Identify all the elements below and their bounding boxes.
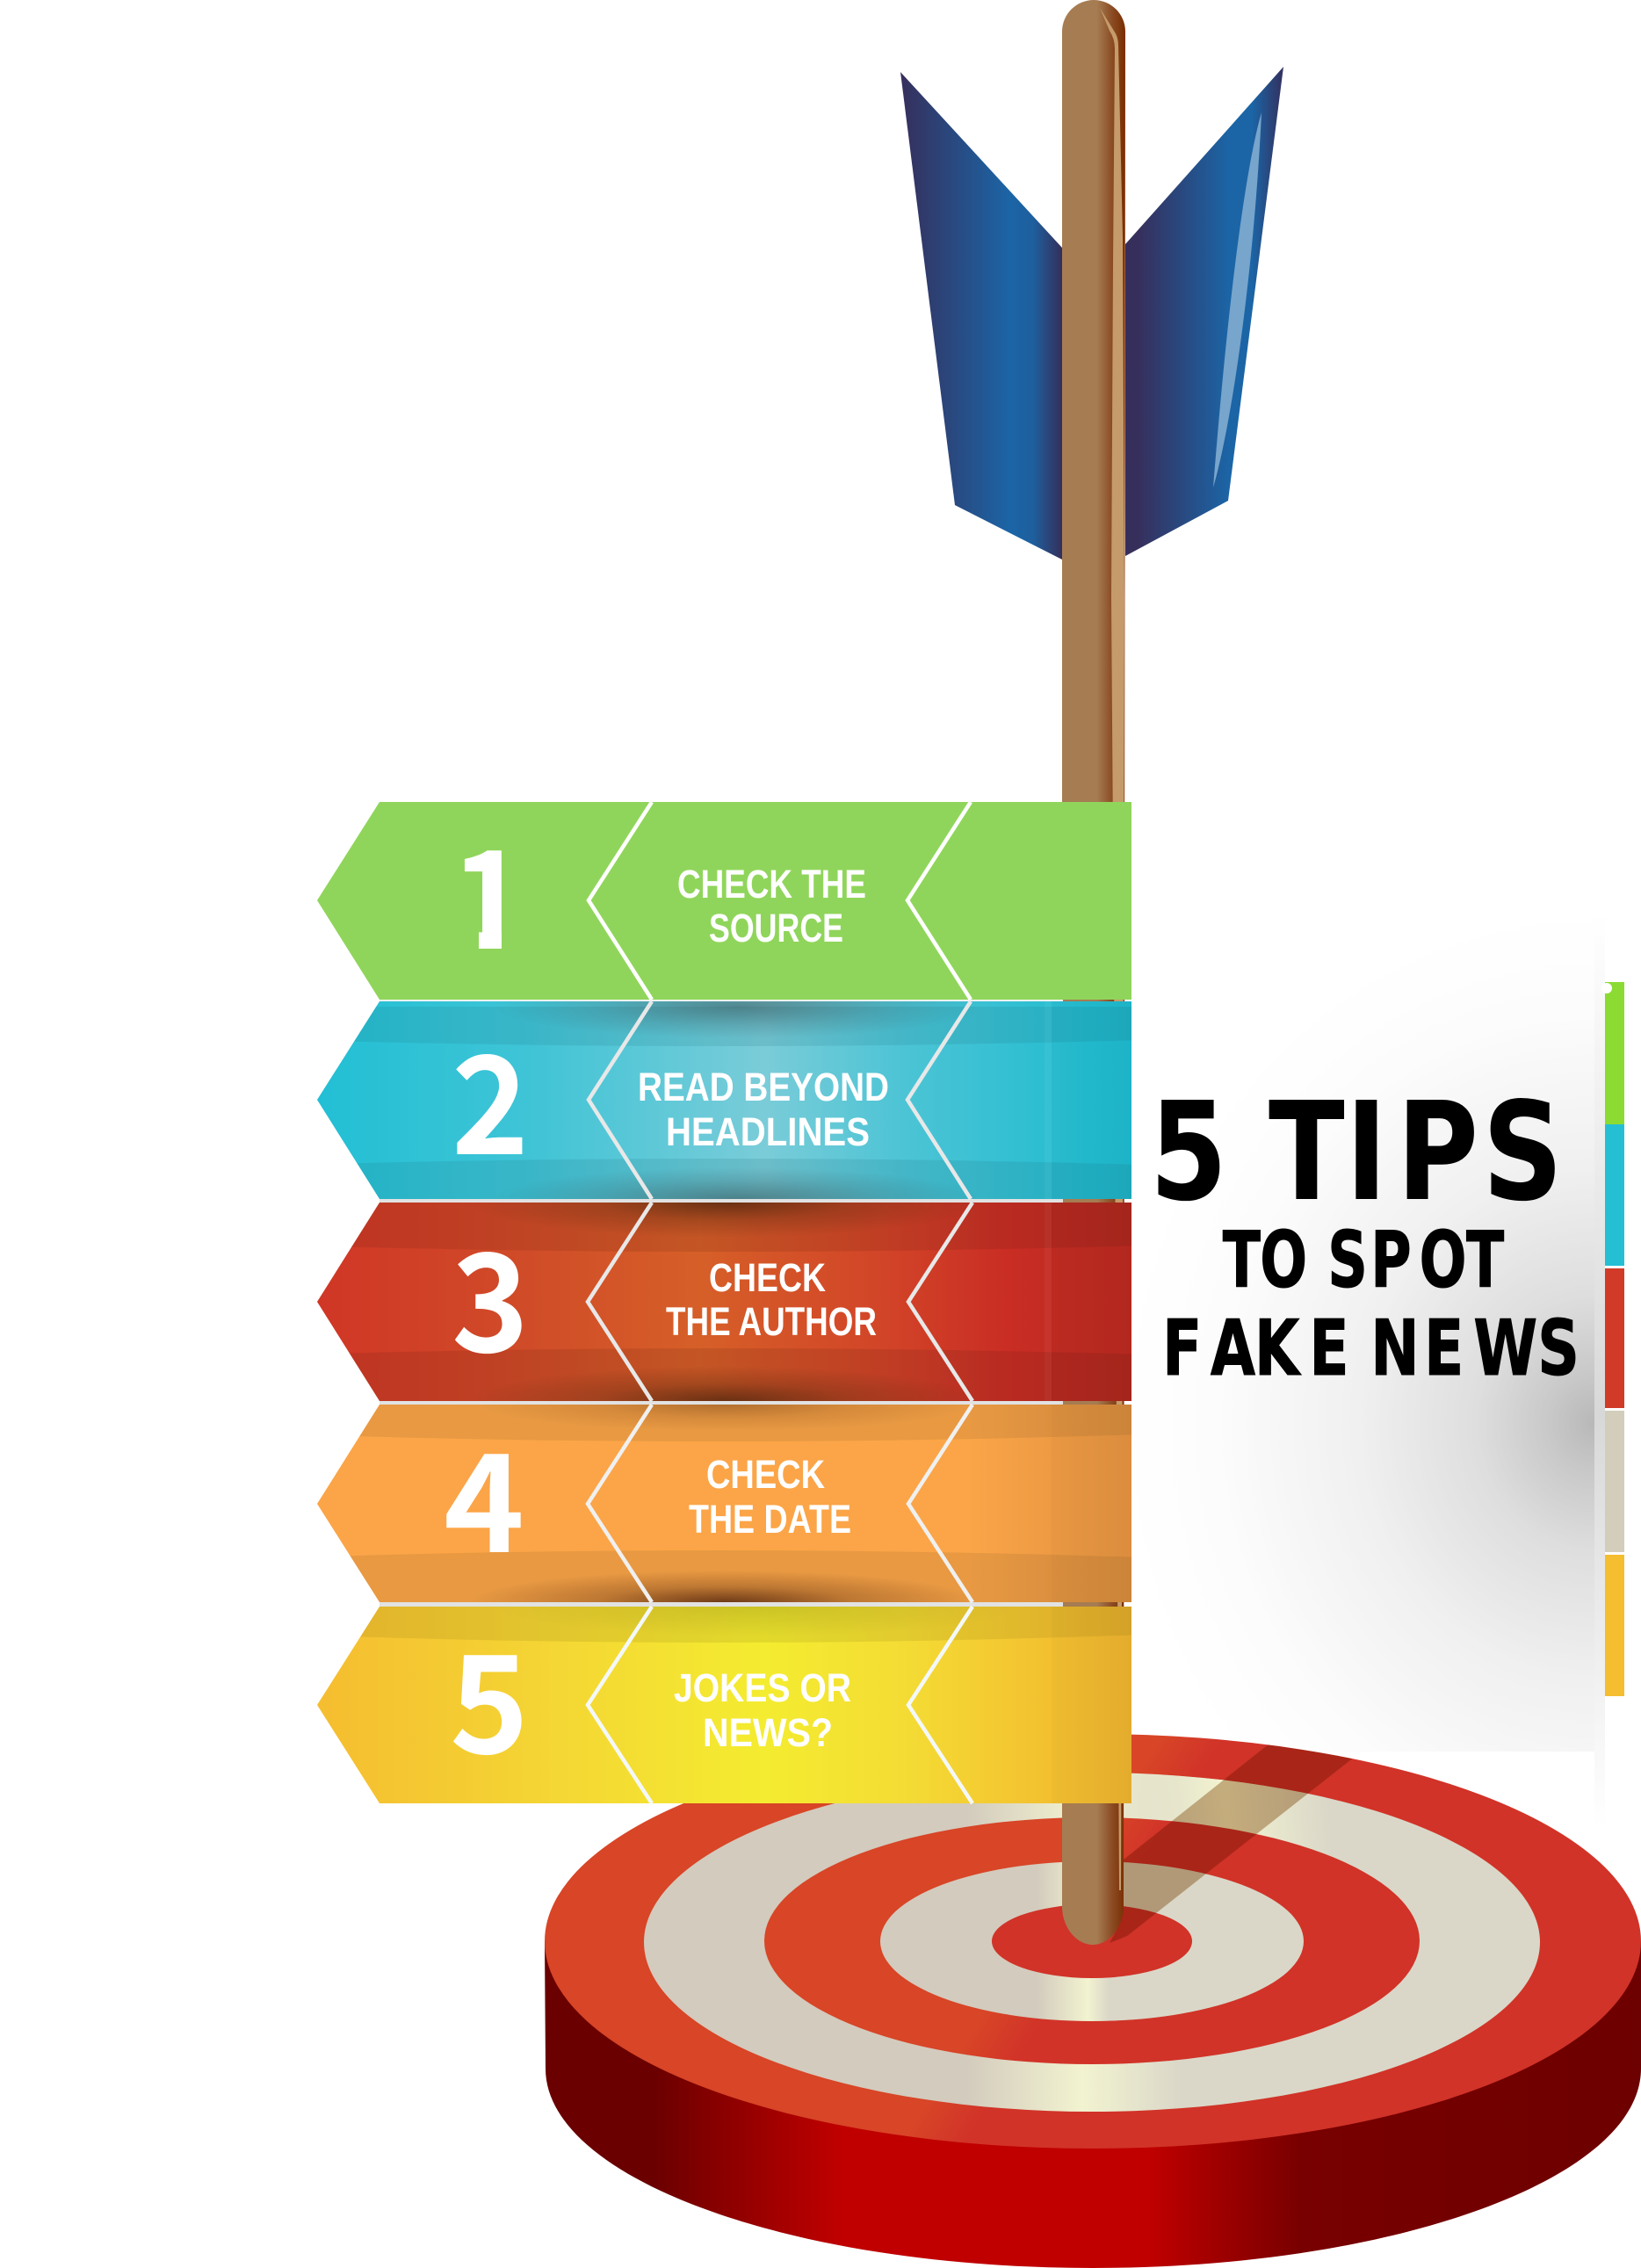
label: NEWS? [703,1710,833,1755]
title line 1: 5 TIPS [1150,1073,1563,1232]
label: THE DATE [689,1497,851,1542]
label: CHECK [709,1255,826,1300]
title line 3: FAKE NEWS [1162,1304,1580,1393]
label: CHECK THE [677,862,866,906]
label [638,1065,889,1154]
target outer red ring [545,1734,1641,2149]
title line 2: TO SPOT [1223,1217,1504,1306]
gaps between ribbon bands [380,1000,1063,1607]
number 3: 3 [452,1194,529,1391]
arrow [900,0,1283,1945]
arrow shadow on target [1110,1744,1355,1943]
label [674,1665,851,1755]
band 5: jokes or news [317,1606,1131,1804]
target inner beige ring [880,1861,1304,2021]
number 2: 2 [452,996,529,1194]
label: READ BEYOND [638,1065,889,1109]
number 4: 4 [444,1394,524,1592]
target inner red ring [764,1817,1420,2064]
band 1: check the source [317,791,1131,1000]
band 3: check the author [317,1203,1131,1401]
band 2: read beyond headlines [317,1000,1131,1199]
number 5: 5 [450,1595,529,1793]
label: THE AUTHOR [666,1299,877,1344]
target: bullseye board [545,1734,1641,2268]
panel: shaded white page behind the title [1131,914,1605,1827]
band 4: check the date [317,1404,1131,1603]
label [666,1255,877,1344]
label: CHECK [706,1452,825,1497]
shaft highlight [1100,8,1124,1890]
number 1: 1 [451,791,528,988]
fletching highlight [1213,112,1261,488]
title: 5 tips to spot fake news [1150,1073,1580,1393]
target bullseye [992,1904,1192,1978]
label [677,862,866,950]
target side wall [545,1941,1641,2268]
target beige ring [644,1773,1540,2112]
arrow shaft [1062,0,1125,1945]
label: HEADLINES [666,1109,870,1154]
label [689,1452,851,1542]
right fletching [1125,67,1283,556]
label: JOKES OR [674,1665,851,1710]
page tabs on right edge [1601,982,1624,1696]
left fletching [900,72,1062,560]
label: SOURCE [709,906,843,950]
